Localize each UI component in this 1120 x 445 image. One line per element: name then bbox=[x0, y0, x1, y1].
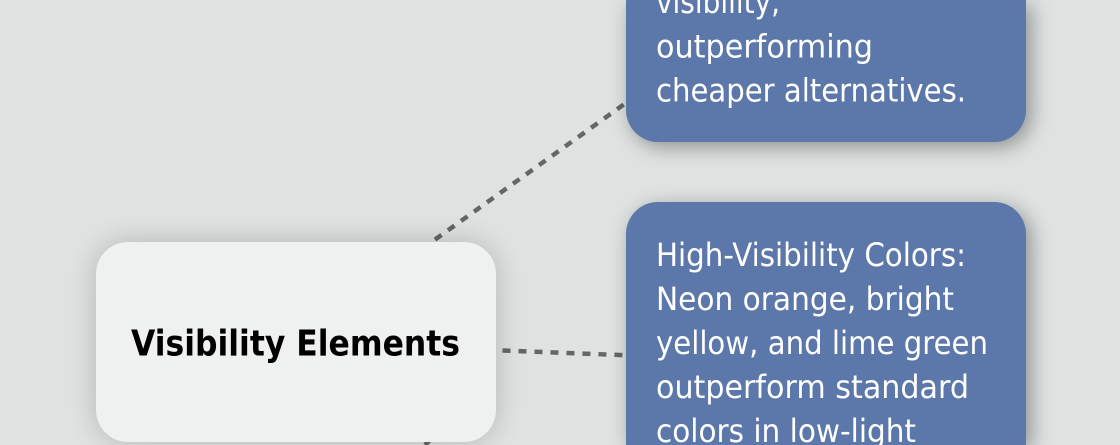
text block: high-visibility colors: yellow, and lime green bbox=[656, 324, 988, 362]
panel: top blue card bbox=[626, 0, 1026, 142]
text block: high-visibility colors: Neon orange, bright bbox=[656, 280, 954, 318]
heading: visibility elements: Visibility Elements bbox=[131, 324, 460, 364]
text block: high-visibility colors: outperform standard bbox=[656, 368, 969, 406]
text block: top card: cheaper alternatives. bbox=[656, 72, 966, 110]
panel: visibility elements node bbox=[96, 242, 496, 442]
text block: high-visibility colors: High-Visibility Colors: bbox=[656, 236, 966, 274]
text block: top card: outperforming bbox=[656, 28, 873, 66]
panel: high-visibility colors card bbox=[626, 202, 1026, 445]
text block: high-visibility colors bbox=[656, 236, 988, 445]
text block: top card bbox=[656, 0, 966, 110]
